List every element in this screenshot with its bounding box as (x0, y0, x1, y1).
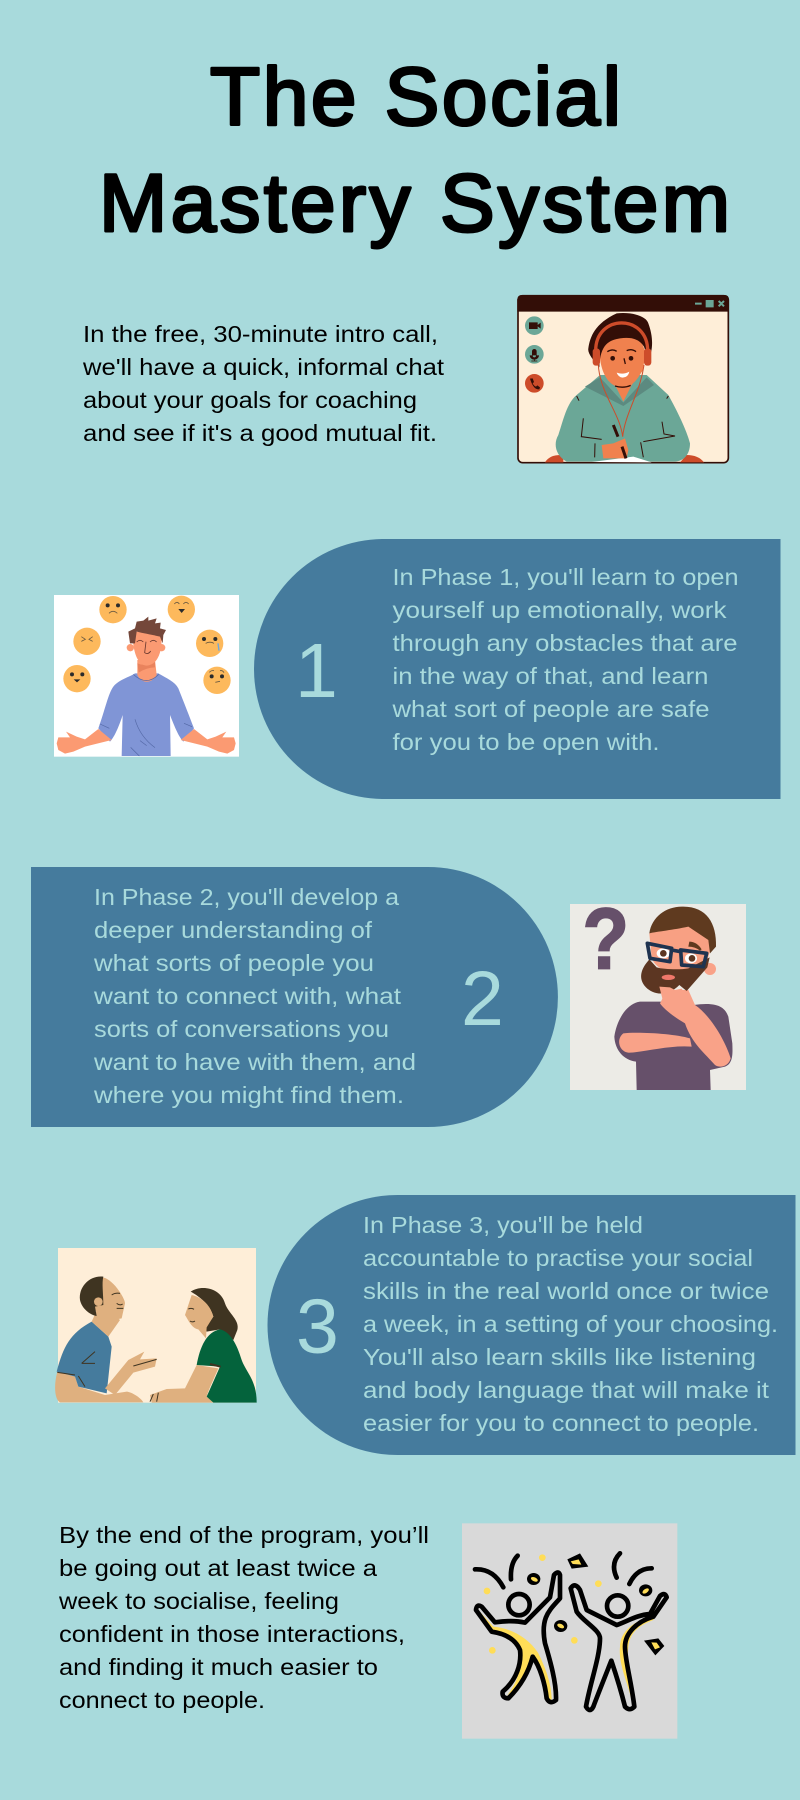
icon: two celebrating people (462, 1523, 677, 1739)
phase 2 text: sorts of conversations you (94, 1016, 389, 1042)
phase 3 text: In Phase 3, you'll be held (363, 1212, 643, 1238)
text block: intro call (82, 321, 445, 446)
icon: thinking man with question mark: ? (582, 892, 629, 988)
text block: intro call: about your goals for coaching (83, 387, 417, 413)
number 2: 2 (461, 956, 504, 1042)
text block: program outcome: and finding it much easier to (59, 1654, 378, 1680)
title (99, 52, 730, 249)
panel: phase 3 (268, 1195, 796, 1455)
phase 1 text: In Phase 1, you'll learn to open (392, 564, 738, 590)
phase 1 text: yourself up emotionally, work (392, 597, 727, 623)
number 3: 3 (296, 1284, 339, 1370)
panel: phase 2 (31, 867, 558, 1127)
phase 1 text: through any obstacles that are (392, 630, 738, 656)
phase 3 text (363, 1212, 778, 1436)
icon: video call window (517, 295, 729, 463)
phase 1 text (391, 564, 738, 755)
phase 1 text: in the way of that, and learn (392, 663, 708, 689)
text block: program outcome: confident in those interactions, (59, 1621, 405, 1647)
title: The Social (210, 52, 621, 142)
text block: program outcome: week to socialise, feeling (58, 1588, 339, 1614)
icon: thinking man with question mark (570, 892, 746, 1090)
text block: program outcome: be going out at least twice a (59, 1555, 377, 1581)
text block: intro call: and see if it's a good mutual fit. (83, 420, 437, 446)
panel: phase 1 (254, 539, 780, 799)
icon: two people talking (55, 1248, 257, 1403)
phase 2 text: want to have with them, and (93, 1049, 416, 1075)
phase 2 text: deeper understanding of (94, 917, 373, 943)
text block: program outcome: connect to people. (59, 1687, 265, 1713)
phase 1 text: what sort of people are safe (391, 696, 710, 722)
phase 2 text: what sorts of people you (93, 950, 374, 976)
phase 2 text: want to connect with, what (93, 983, 402, 1009)
phase 3 text: and body language that will make it (363, 1377, 770, 1403)
phase 3 text: accountable to practise your social (363, 1245, 753, 1271)
text block: program outcome: By the end of the program, you’ll (59, 1522, 429, 1548)
phase 3 text: skills in the real world once or twice (363, 1278, 769, 1304)
text block: program outcome (58, 1522, 429, 1713)
phase 3 text: easier for you to connect to people. (363, 1410, 759, 1436)
phase 1 text: for you to be open with. (392, 729, 660, 755)
icon: man surrounded by emotions (54, 595, 239, 757)
phase 3 text: a week, in a setting of your choosing. (363, 1311, 778, 1337)
phase 2 text: where you might find them. (93, 1082, 404, 1108)
number 1: 1 (295, 628, 338, 714)
text block: intro call: In the free, 30-minute intro call, (83, 321, 438, 347)
title: Mastery System (99, 158, 730, 249)
text block: intro call: we'll have a quick, informal chat (82, 354, 445, 380)
phase 2 text: In Phase 2, you'll develop a (94, 884, 399, 910)
phase 2 text (93, 884, 416, 1108)
phase 3 text: You'll also learn skills like listening (363, 1344, 756, 1370)
